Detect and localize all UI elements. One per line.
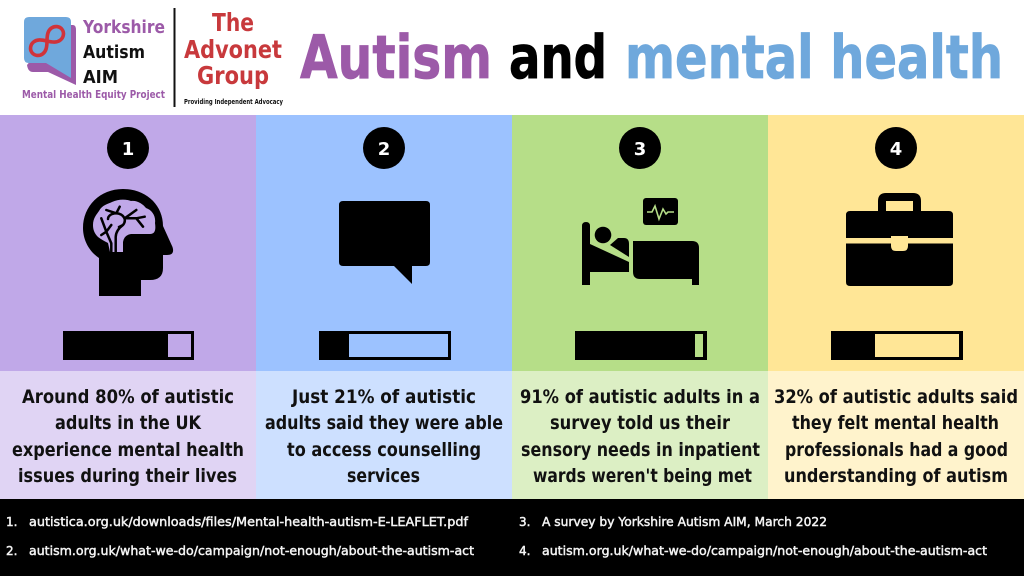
- footer: references: 2.: [6, 544, 17, 558]
- text: 80% statistic: adults in the UK: [55, 412, 202, 434]
- number badge 3: 3: [634, 139, 646, 160]
- text: 21% statistic: services: [347, 465, 420, 487]
- footer: references: [0, 499, 1024, 576]
- title: Autism: [300, 23, 492, 93]
- text: 21% statistic: Just 21% of autistic: [290, 386, 476, 408]
- panel: 1 mental health issues: [0, 115, 256, 499]
- footer: references: autism.org.uk/what-we-do/campaign/not-enough/about-the-autism-act: [542, 544, 987, 558]
- progress bar: 21%: [319, 331, 451, 360]
- text: 91% statistic: sensory needs in inpatient: [521, 439, 760, 461]
- panel: 4 professional understanding: [768, 115, 1024, 499]
- logo: The Advonet Group: The: [212, 8, 254, 37]
- text: 80% statistic: experience mental health: [12, 439, 244, 461]
- text: 21% statistic: adults said they were able: [265, 412, 503, 434]
- progress bar: 32%: [831, 331, 963, 360]
- text: 91% statistic: 91% of autistic adults in a: [520, 386, 760, 408]
- text: 80% statistic: issues during their lives: [18, 465, 237, 487]
- title: [300, 23, 1003, 93]
- footer: references: autistica.org.uk/downloads/files/Mental-health-autism-E-LEAFLET.pdf: [29, 515, 469, 529]
- icon: briefcase: [846, 193, 953, 286]
- text: 21% statistic: to access counselling: [287, 439, 481, 461]
- footer: references: autism.org.uk/what-we-do/campaign/not-enough/about-the-autism-act: [29, 544, 474, 558]
- number badge 1: 1: [122, 139, 134, 160]
- logo: Yorkshire Autism AIM: Mental Health Equity Project: [22, 88, 165, 101]
- text: 32% statistic: [774, 386, 1018, 487]
- icon: speech bubble: [339, 201, 430, 284]
- logo: The Advonet Group: [184, 8, 283, 106]
- logo: The Advonet Group: Advonet: [184, 35, 282, 64]
- number badge 4: [875, 127, 917, 169]
- icon: hospital bed with monitor: [582, 198, 699, 285]
- progress bar: 80%: [63, 331, 194, 360]
- footer: references: 4.: [519, 544, 530, 558]
- logo: Yorkshire Autism AIM: Yorkshire: [82, 17, 165, 38]
- number badge 3: [619, 127, 661, 169]
- logo: The Advonet Group: Providing Independent Advocacy: [184, 98, 283, 106]
- number badge 2: [363, 127, 405, 169]
- title: and: [509, 23, 607, 93]
- logo: Yorkshire Autism AIM: AIM: [83, 67, 118, 88]
- progress bar: 91%: [575, 331, 707, 360]
- text: 91% statistic: wards weren't being met: [533, 465, 752, 487]
- icon: speech bubble with infinity symbol: [24, 17, 76, 85]
- number badge 4: 4: [890, 139, 902, 160]
- logo: Yorkshire Autism AIM: Autism: [83, 42, 145, 63]
- number badge 1: [107, 127, 149, 169]
- icon: head with brain: [83, 189, 173, 296]
- number badge 2: 2: [378, 139, 390, 160]
- footer: references: A survey by Yorkshire Autism AIM, March 2022: [542, 515, 827, 529]
- text: 91% statistic: [520, 386, 760, 487]
- text: 80% statistic: [12, 386, 244, 487]
- text: 80% statistic: Around 80% of autistic: [22, 386, 234, 408]
- logo: The Advonet Group: Group: [197, 61, 269, 90]
- panel: 2 counselling access: [256, 115, 512, 499]
- text: 21% statistic: [265, 386, 503, 487]
- logo: Yorkshire Autism AIM: [22, 17, 165, 101]
- footer: references: 3.: [519, 515, 530, 529]
- footer: references: 1.: [6, 515, 17, 529]
- text: 91% statistic: survey told us their: [550, 412, 731, 434]
- panel: 3 inpatient sensory needs: [512, 115, 768, 499]
